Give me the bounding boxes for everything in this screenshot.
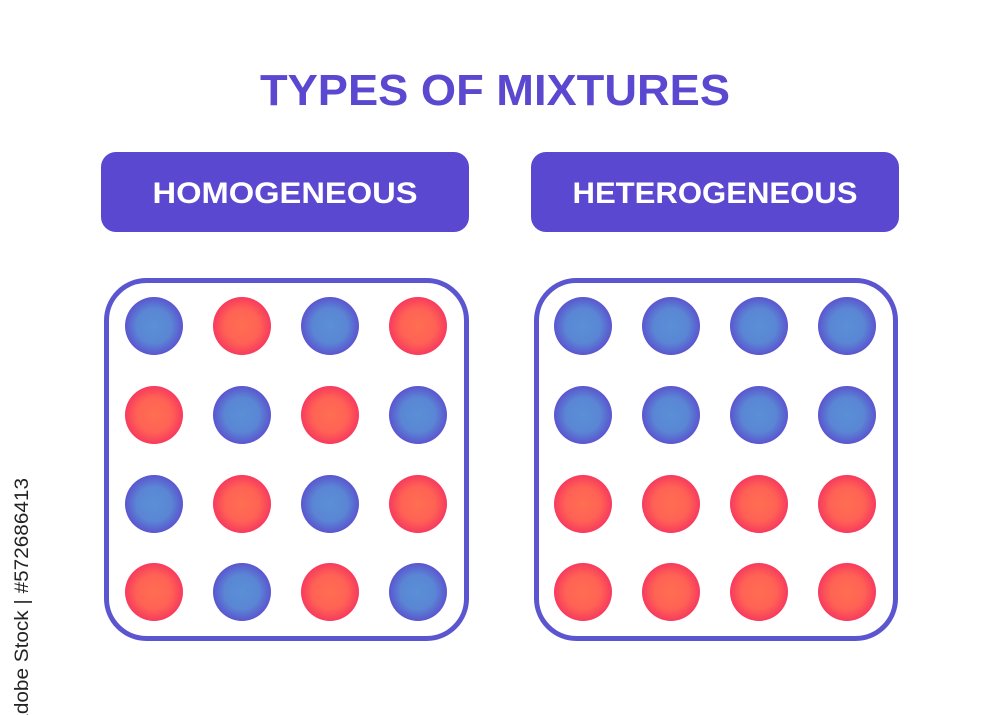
title: TYPES OF MIXTURES [260, 66, 730, 115]
header: heterogeneous [531, 152, 899, 232]
panel: heterogeneous mixture [536, 280, 896, 638]
header: homogeneous: HOMOGENEOUS [152, 177, 418, 210]
header: heterogeneous: HETEROGENEOUS [572, 177, 858, 210]
header: homogeneous [101, 152, 469, 232]
panel: homogeneous mixture [106, 280, 466, 638]
